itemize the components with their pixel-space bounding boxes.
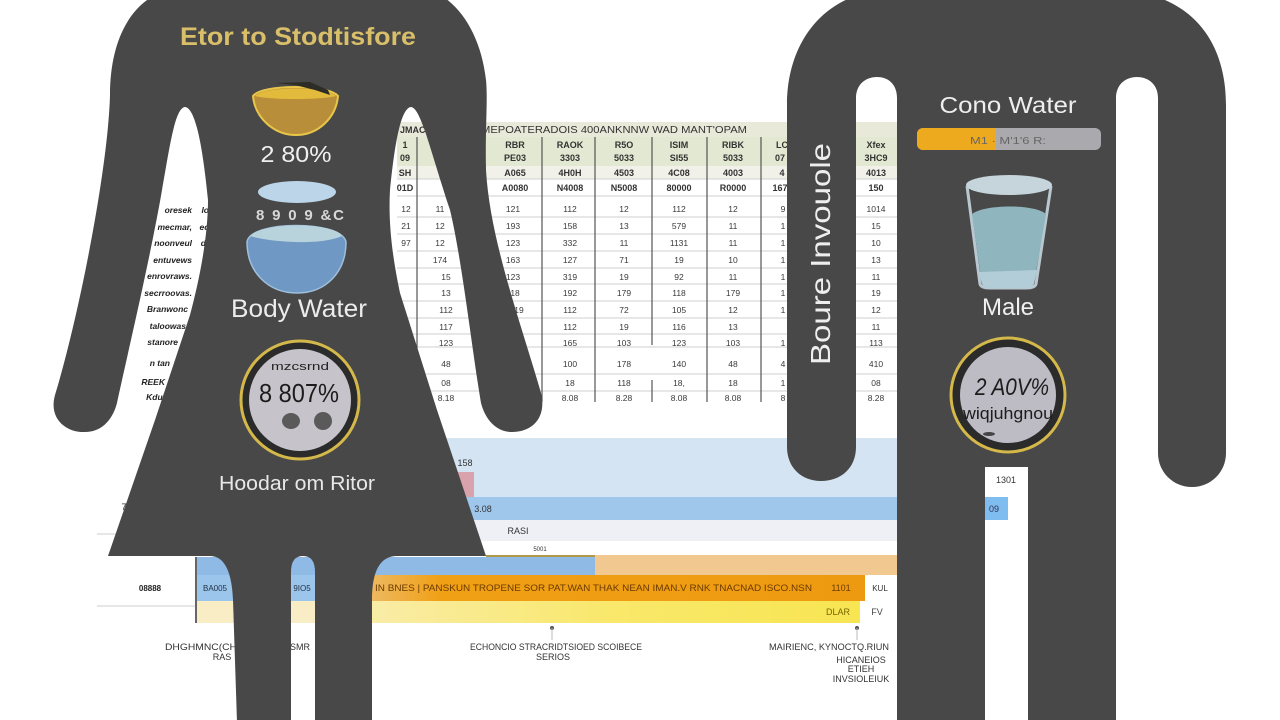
chart band: mid blue [440, 497, 897, 520]
female gauge badge [241, 341, 359, 459]
table body values: 123 [506, 272, 520, 282]
chart band: light blue [440, 438, 897, 497]
chart labels: 1101 [831, 583, 851, 593]
droplets text: 8 9 0 9 &C [256, 207, 344, 224]
row labels beside table: Branwonc [147, 304, 188, 314]
table body values: 11 [872, 322, 881, 332]
row labels beside table: noonveul [154, 238, 193, 248]
gauge value: 8 807% [259, 378, 339, 408]
gauge dots [282, 413, 300, 429]
table body values: 8 [781, 393, 786, 403]
table header rows: N5008 [611, 183, 637, 193]
table body values: 13 [619, 221, 629, 231]
table header rows: RAOK [557, 140, 584, 150]
chart band: blue [197, 557, 595, 575]
table body values: 19 [871, 288, 881, 298]
table body values: 11 [729, 272, 738, 282]
table body values: 08 [441, 378, 451, 388]
icon: water glass [966, 175, 1052, 288]
table body values: 118 [672, 288, 686, 298]
chart labels: 9IO5 [293, 584, 311, 593]
table header rows: 3303 [560, 153, 580, 163]
row labels beside table [141, 205, 209, 402]
table body values: 112 [563, 204, 577, 214]
chart band: orange [372, 575, 865, 601]
table body values: 12 [871, 305, 881, 315]
table body values: 179 [617, 288, 631, 298]
table body values: 140 [672, 359, 686, 369]
chart labels: IN BNES | PANSKUN TROPENE SOR PAT.WAN THAK NEAN IMAN.V RNK TNACNAD ISCO.NSN [375, 583, 812, 594]
table body values: 127 [563, 255, 577, 265]
chart footnotes: ECHONCIO STRACRIDTSIOED SCOIBECE [470, 642, 642, 652]
table body values: 1 [781, 338, 786, 348]
table body values: 1 [781, 221, 786, 231]
chart labels: 158 [457, 458, 473, 468]
table body values: 579 [672, 221, 686, 231]
table body values: 15 [441, 272, 451, 282]
table header rows [397, 140, 888, 193]
table body values: 11 [729, 221, 738, 231]
chart band: olive top edge [486, 555, 595, 557]
table header rows: ISIM [670, 140, 688, 150]
table body values: 1 [781, 305, 786, 315]
chart labels: RASI [507, 526, 529, 536]
table header rows: SI55 [670, 153, 688, 163]
left chart tick: 7 [121, 502, 127, 512]
male label: Male [982, 294, 1034, 321]
table header rows: R5O [615, 140, 633, 150]
chart labels: BA005 [203, 584, 228, 593]
male gauge badge [951, 338, 1065, 452]
slot blue bar [985, 497, 1008, 520]
table header rows: LC [776, 140, 788, 150]
table body values: 11 [872, 272, 881, 282]
table body values: 121 [506, 204, 520, 214]
chart footnotes: RAS [213, 652, 231, 662]
row labels beside table: lo [201, 205, 209, 215]
table body values: 117 [439, 322, 453, 332]
chart footnotes: INVSIOLEIUK [833, 674, 889, 684]
table header rows: RIBK [722, 140, 744, 150]
table header rows: 80000 [666, 183, 692, 193]
table header rows: RBR [505, 140, 525, 150]
table body values: 8.28 [868, 393, 885, 403]
table body values: 48 [441, 359, 451, 369]
table body values: 112 [439, 305, 453, 315]
male progress bar: M1 · M'1'6 R: [970, 136, 1046, 147]
table header rows: 09 [400, 153, 410, 163]
table body values: 113 [869, 338, 883, 348]
table body values: 11 [620, 238, 629, 248]
gauge caption: mzcsrnd [271, 361, 329, 373]
table body values [401, 204, 886, 403]
row labels beside table: enrovraws. [147, 271, 192, 281]
table header rows: R0000 [720, 183, 746, 193]
chart footnotes: SMR [290, 642, 310, 652]
table body values: 18, [673, 378, 685, 388]
table body values: 48 [728, 359, 738, 369]
chart labels: KUL [872, 584, 888, 593]
table header rows: 07 [775, 153, 785, 163]
table body values: 116 [672, 322, 686, 332]
table body values: 105 [672, 305, 686, 315]
chart axis line [195, 557, 197, 623]
male heading: Cono Water [940, 92, 1077, 118]
table body values: 10 [871, 238, 881, 248]
table body values: 1 [781, 378, 786, 388]
chart band: pale grey [440, 520, 897, 541]
table body values: 71 [619, 255, 629, 265]
row labels beside table: ec [200, 222, 209, 232]
table body values: 118 [617, 378, 631, 388]
icon: golden bowl [253, 82, 338, 135]
chart footnotes [165, 626, 889, 684]
table body values: 332 [563, 238, 577, 248]
table header rows: SH [399, 168, 411, 178]
table body values: 8.08 [671, 393, 688, 403]
female silhouette [54, 0, 542, 720]
table header rows: N4008 [557, 183, 583, 193]
table header rows: 167 [772, 183, 788, 193]
table body values: 179 [726, 288, 740, 298]
row labels beside table: Kdul [146, 392, 166, 402]
table body values: 19 [619, 272, 629, 282]
table body values: 12 [619, 204, 629, 214]
chart labels: 3.08 [474, 504, 492, 514]
female heading: Etor to Stodtisfore [180, 23, 416, 51]
water disc [258, 181, 336, 203]
table body values: 11 [729, 238, 738, 248]
table body values: 12 [435, 221, 445, 231]
table body values: 8.28 [616, 393, 633, 403]
male progress bar [917, 128, 1101, 150]
table body values: 319 [563, 272, 577, 282]
row labels beside table: n tan [150, 358, 170, 368]
table body values: 9 [781, 204, 786, 214]
table header rows: 4 [779, 168, 785, 178]
table body values: 100 [563, 359, 577, 369]
table header rows: A0080 [502, 183, 528, 193]
table title fragment: JMAC [400, 125, 426, 135]
table body values: 112 [672, 204, 686, 214]
male side label: Boure Invouole [805, 143, 836, 365]
female percentage: 2 80% [260, 141, 332, 167]
chart labels: 08888 [139, 584, 162, 593]
chart labels [139, 458, 888, 617]
table body values: 72 [619, 305, 629, 315]
table body values: 8.08 [725, 393, 742, 403]
row labels beside table: stanore [147, 337, 178, 347]
chart footnotes: ETIEH [848, 664, 874, 674]
table body values: 19 [514, 305, 524, 315]
chart labels: FV [871, 607, 883, 617]
table title: MEPOATERADOIS 400ANKNNW WAD MANT'OPAM [481, 125, 747, 136]
table body values: 163 [506, 255, 520, 265]
female body water label: Body Water [231, 295, 367, 323]
row labels beside table: secrroovas. [144, 288, 192, 298]
table body values: 123 [439, 338, 453, 348]
table body values: 4 [781, 359, 786, 369]
blue bowl [247, 226, 346, 293]
gauge value: 2 A0V% [974, 374, 1049, 401]
table header rows: 01D [397, 183, 414, 193]
table header rows: 3HC9 [864, 153, 888, 163]
table body values: 13 [728, 322, 738, 332]
row labels beside table: entuvews [153, 255, 192, 265]
row labels beside table: oresek [165, 205, 193, 215]
stacked bar chart [97, 438, 897, 684]
table header rows: 5033 [614, 153, 634, 163]
table body values: 178 [617, 359, 631, 369]
table header rows: PE03 [504, 153, 526, 163]
table body values: 1 [781, 255, 786, 265]
table body values: 12 [435, 238, 445, 248]
table body values: 8.18 [438, 393, 455, 403]
table body values: 1 [781, 238, 786, 248]
chart footnotes: HICANEIOS [836, 655, 886, 665]
table body values: 193 [506, 221, 520, 231]
table body values: 92 [674, 272, 684, 282]
table body values: 12 [728, 204, 738, 214]
chart band: yellow [372, 601, 860, 623]
chart labels: 5001 [533, 547, 547, 553]
male silhouette [787, 0, 1226, 720]
table header rows: Xfex [866, 140, 886, 150]
table body values: 8.08 [562, 393, 579, 403]
table body values: 103 [617, 338, 631, 348]
table header rows: 4H0H [558, 168, 582, 178]
table header rows: 1 [402, 140, 408, 150]
table body values: 19 [619, 322, 629, 332]
table body values: 97 [401, 238, 411, 248]
table body values: 15 [871, 221, 881, 231]
table header rows: 150 [868, 183, 884, 193]
table body values: 410 [869, 359, 883, 369]
table body values: 165 [563, 338, 577, 348]
table body values: 1131 [670, 238, 688, 248]
chart footnotes: MAIRIENC, KYNOCTQ.RIUN [769, 642, 889, 652]
gauge caption: wiqjuhgnou [962, 404, 1053, 423]
row labels beside table: d [201, 238, 207, 248]
male slot chart: 09 [989, 504, 999, 514]
data table [397, 122, 897, 403]
table body values: 103 [726, 338, 740, 348]
table body values: 18 [565, 378, 575, 388]
chart band: pink marker [440, 472, 474, 497]
table body values: 18 [728, 378, 738, 388]
row labels beside table: taloowas [150, 321, 186, 331]
chart footnotes: SERIOS [536, 652, 570, 662]
chart band: pale yellow [197, 601, 373, 623]
table body values: 112 [563, 322, 577, 332]
table body values: 13 [441, 288, 451, 298]
table body values: 11 [436, 204, 445, 214]
table body values: 192 [563, 288, 577, 298]
table body values: 19 [674, 255, 684, 265]
table body values: 1 [781, 272, 786, 282]
slot value: 1301 [996, 475, 1016, 485]
table header rows: 5033 [723, 153, 743, 163]
table header rows: A065 [504, 168, 526, 178]
table header rows: 4013 [866, 168, 886, 178]
table body values: 158 [563, 221, 577, 231]
table body values: 10 [728, 255, 738, 265]
female bottom label: Hoodar om Ritor [219, 473, 375, 495]
table body values: 118 [506, 288, 520, 298]
table body values: 112 [563, 305, 577, 315]
table body values: 12 [401, 204, 411, 214]
chart labels: DLAR [826, 607, 850, 617]
table body values: 13 [871, 255, 881, 265]
table header rows: 4003 [723, 168, 743, 178]
male slot chart [985, 475, 1016, 520]
table header rows: 4C08 [668, 168, 690, 178]
icon: water bowl [247, 181, 346, 293]
table body values: 21 [401, 221, 411, 231]
chart footnotes: DHGHMNC(CH [165, 642, 237, 652]
table body values: 123 [672, 338, 686, 348]
table body values: 123 [506, 238, 520, 248]
row labels beside table: REEK [141, 377, 166, 387]
row labels beside table: mecmar, [158, 222, 192, 232]
chart band: pale orange [595, 555, 897, 575]
table body values: 08 [871, 378, 881, 388]
table body values: 174 [433, 255, 447, 265]
table body values: 1 [781, 288, 786, 298]
table header rows: 4503 [614, 168, 634, 178]
table body values: 1014 [867, 204, 886, 214]
table body values: 12 [728, 305, 738, 315]
chart band: small blue start [197, 575, 373, 601]
